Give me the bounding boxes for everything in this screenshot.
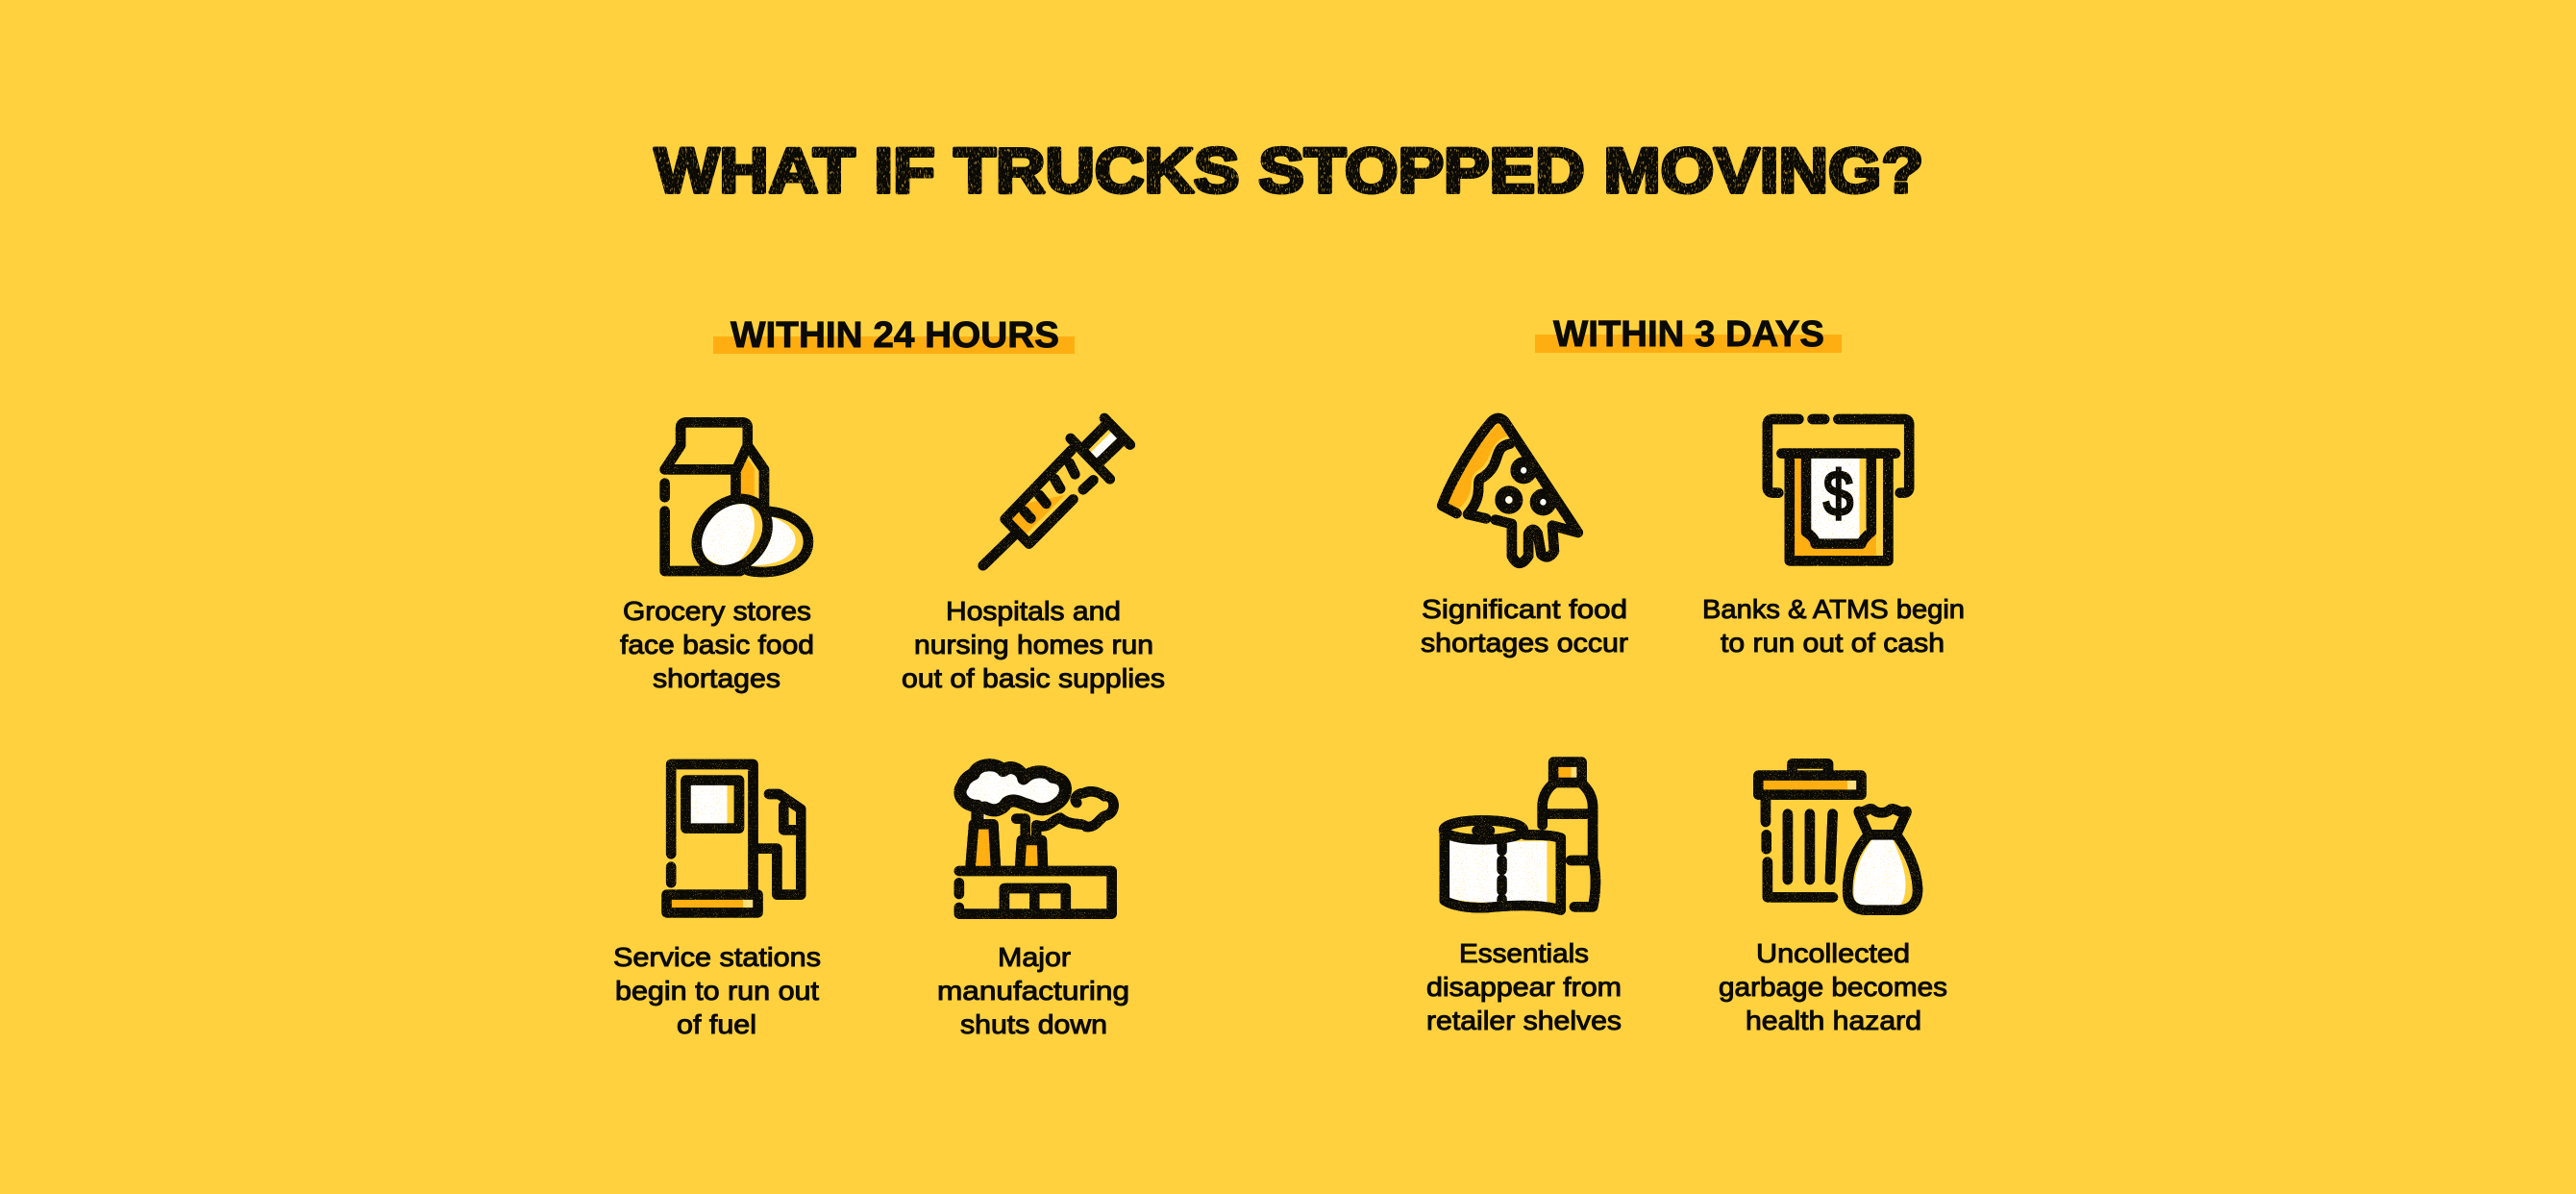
- label: uncollected garbage: health hazard: [1746, 1006, 1921, 1035]
- label: service stations: [613, 942, 821, 1039]
- label: service stations: Service stations: [613, 942, 821, 972]
- label: banks and ATMs: Banks & ATMS begin: [1702, 594, 1965, 624]
- label: major manufacturing: [937, 942, 1129, 1039]
- icon: fuel pump: [667, 764, 801, 912]
- label: grocery stores: face basic food: [620, 630, 814, 659]
- label: essentials: [1426, 938, 1622, 1035]
- label: major manufacturing: shuts down: [960, 1009, 1107, 1039]
- label: service stations: begin to run out: [615, 976, 819, 1006]
- label: grocery stores: Grocery stores: [623, 596, 811, 626]
- icon: milk carton and eggs: [665, 422, 808, 582]
- title: WHAT IF TRUCKS STOPPED MOVING?: [655, 135, 1923, 206]
- icon: trash can and garbage bag: [1758, 763, 1918, 910]
- label: hospitals: Hospitals and: [946, 596, 1121, 626]
- label: uncollected garbage: garbage becomes: [1719, 972, 1947, 1002]
- label: grocery stores: [620, 596, 814, 693]
- label: significant food shortages: Significant food: [1422, 594, 1627, 624]
- label: uncollected garbage: [1719, 938, 1947, 1035]
- icon: toilet roll and bottle: [1444, 762, 1596, 910]
- label: banks and ATMs: to run out of cash: [1721, 628, 1944, 658]
- icon: ATM with banknote: [1768, 419, 1909, 560]
- icon: ATM with banknote: $: [1823, 458, 1853, 529]
- label: major manufacturing: Major: [998, 942, 1071, 972]
- label: service stations: of fuel: [677, 1009, 756, 1039]
- heading: within 3 days: WITHIN 3 DAYS: [1553, 314, 1824, 355]
- label: hospitals: nursing homes run: [914, 630, 1153, 659]
- label: banks and ATMs: [1702, 594, 1965, 658]
- icon: pizza slice: [1442, 418, 1578, 563]
- heading: within 24 hours: WITHIN 24 HOURS: [731, 315, 1059, 356]
- label: hospitals: out of basic supplies: [902, 663, 1165, 693]
- icon: factory: [959, 765, 1114, 914]
- label: significant food shortages: [1421, 594, 1628, 658]
- icon: syringe: [983, 418, 1130, 565]
- label: essentials: retailer shelves: [1426, 1006, 1622, 1035]
- label: grocery stores: shortages: [653, 663, 780, 693]
- label: major manufacturing: manufacturing: [937, 976, 1129, 1006]
- label: significant food shortages: shortages occur: [1421, 628, 1628, 658]
- label: uncollected garbage: Uncollected: [1756, 938, 1910, 968]
- label: essentials: Essentials: [1459, 938, 1589, 968]
- label: hospitals: [902, 596, 1165, 693]
- label: essentials: disappear from: [1426, 972, 1622, 1002]
